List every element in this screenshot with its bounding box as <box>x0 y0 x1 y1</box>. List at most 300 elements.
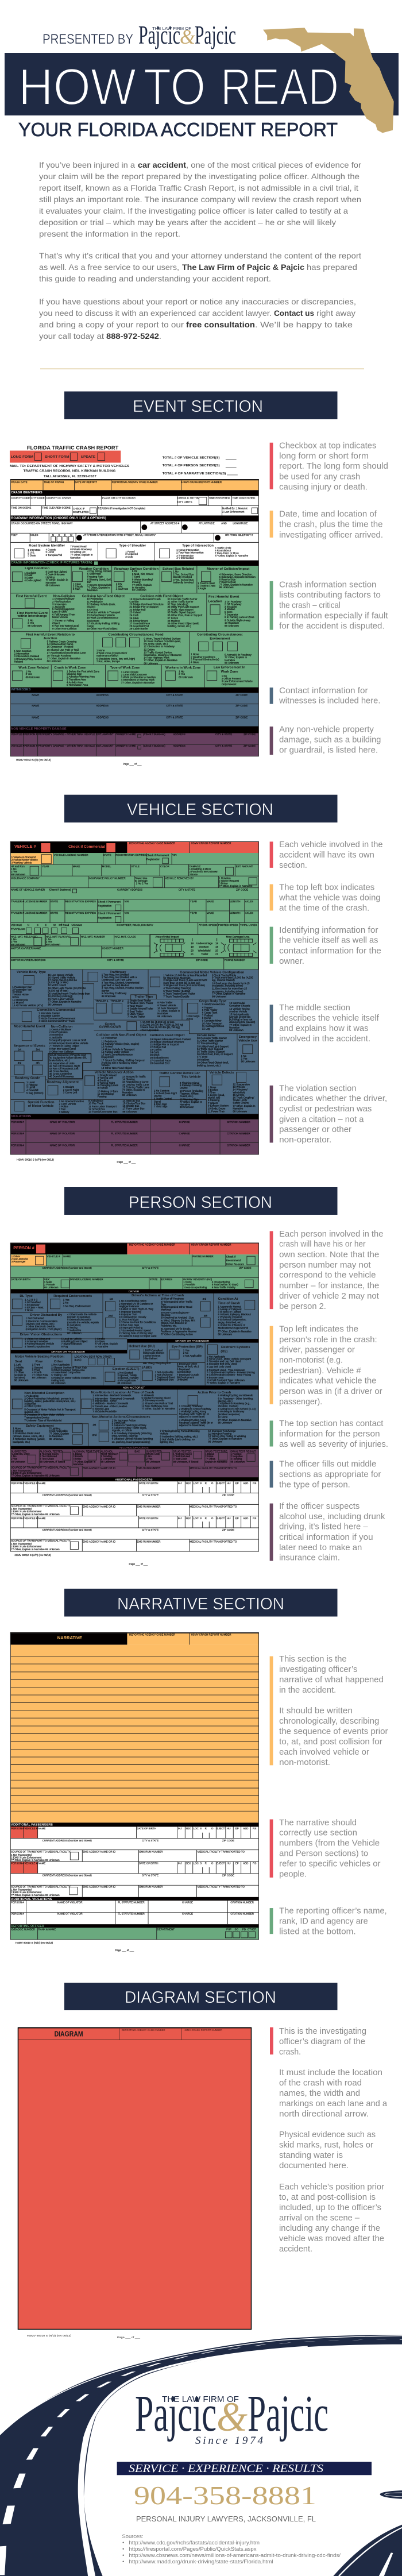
note: middle section: involved in the accident. <box>279 1034 370 1044</box>
crash information block: Contributing Circumstances: Road <box>109 633 164 636</box>
additional passengers block: ABD <box>243 1862 248 1865</box>
additional passengers block: LOC: S <box>194 1482 202 1485</box>
crash information block: Related <box>14 660 23 663</box>
roadway information block: 1 Interstate <box>28 549 41 551</box>
vehicle identification block: VEHICLE LICENSE NUMBER <box>54 853 88 856</box>
vehicle identification block: 1 No 2 Yes <box>136 882 149 885</box>
vehicle description block: 38 Mailbox <box>197 1059 210 1061</box>
person details block: 3 Ejected, Partially <box>117 1377 139 1380</box>
person details block: Roadway with Traffic (in or <box>179 1413 210 1416</box>
person details block: 7 Deployed-Curtain <box>177 1373 199 1376</box>
vehicle description block: 11 Overtaking/ <box>98 1092 114 1095</box>
vehicle identification block: Towed due <box>135 877 148 880</box>
additional passengers block: CURRENT ADDRESS (Number and Street) <box>42 1494 92 1497</box>
non vehicle property damage block: OWNER’S NAME <box>115 733 136 736</box>
additional passengers block: HU <box>227 1827 231 1830</box>
violations block: PERSON # <box>11 1121 24 1123</box>
additional violations block: FL STATUTE NUMBER <box>118 1901 145 1904</box>
intro paragraph 1: it evaluates your claim. If the investigating police officer is later called to testify at a <box>39 206 348 215</box>
intro paragraph 2: The Law Firm of Pajcic & Pajcic <box>182 262 304 272</box>
crash date and time row: TIME OF CRASH <box>44 481 64 484</box>
witnesses block: NAME <box>32 704 39 707</box>
violations block: CHARGE <box>179 1121 190 1123</box>
roadway information block: FEET <box>11 534 18 536</box>
vehicle description block: Vehicle Body Type <box>17 971 47 974</box>
vehicle identification block: TRAILER # <box>11 900 24 903</box>
non vehicle property damage block: ADDRESS <box>173 733 185 736</box>
person details block: (navigation device, DVD player) <box>26 1327 62 1330</box>
person contact block: 1 Driver <box>11 1255 21 1258</box>
vehicle identification block: to Damage: <box>135 879 148 882</box>
person details block: Required Endorsements <box>53 1295 92 1298</box>
note: officer narrative: narrative of what happened <box>279 1675 384 1685</box>
non vehicle property damage block: ZIP CODE <box>243 733 256 736</box>
crash information block: 88 Unknown <box>225 624 239 627</box>
crash information block: 2 Front to Front <box>198 585 216 588</box>
form footer: HSMV 90010 S (V/P) (rev 06/13) <box>17 1158 54 1161</box>
vehicle description block: 88 Unknown <box>212 995 226 998</box>
additional passengers block: 77 Other, Explain In Narrative 88 Unknown <box>11 1859 60 1861</box>
vehicle description block: 25 Ditch <box>150 1053 160 1056</box>
note: person role: indicates what vehicle the <box>279 1377 376 1386</box>
vehicle description block: (vehicle 10,000 lbs <box>229 1015 251 1018</box>
note: date and time: the crash, plus the time the <box>279 520 383 530</box>
crash information block: 23 Culvert <box>129 611 142 614</box>
vehicle description block: 4 Two-Way, Divided, Positive Median <box>102 987 144 990</box>
vehicle description block: 9 Concrete Mixer <box>202 1019 222 1022</box>
vehicle description block: 1 Interstate Carrier <box>38 1011 60 1014</box>
additional passengers block: EMS RUN NUMBER <box>137 1540 161 1543</box>
person details block: 2 Inclement Weather <box>25 1340 48 1343</box>
crash information block: 77 Other, Explain in Narrative <box>47 657 80 660</box>
person details block: 3 Right <box>14 1369 22 1372</box>
crash identifiers block: COMPLETED <box>73 511 89 513</box>
person details block: Vehicle <box>160 1432 168 1435</box>
vehicle identification block: 88 Unknown <box>46 943 60 946</box>
vehicle description block: 8 Bus <box>12 996 20 999</box>
additional passengers block: 2 EMS 3 Law Enforcement <box>11 1510 42 1513</box>
note: crash information: the crash – critical <box>279 601 341 611</box>
crash information block: 15 Crossover - Related <box>47 645 74 648</box>
alcohol and drug block: EMS AGENCY NAME OR ID <box>83 1466 115 1469</box>
additional passengers block: EMS RUN NUMBER <box>137 1505 161 1508</box>
person details block: Driver Vision Obstructions <box>20 1333 62 1337</box>
vehicle identification block: STATE <box>51 912 58 914</box>
vehicle description block: 8 Ran into Water/Canal <box>49 1047 76 1050</box>
intro text <box>39 160 361 341</box>
person details block: 28 Disregarded Other Road <box>161 1306 192 1308</box>
note: checkbox: causing injury or death. <box>279 482 368 492</box>
vehicle description block: [4,536 kg] or less) <box>48 981 68 984</box>
vehicle identification block: HAZ. MAT. RELEASED <box>11 935 37 938</box>
person contact block: 5 Fatal (within 30 days) <box>212 1283 238 1286</box>
person contact block: CITY & STATE <box>142 1266 159 1269</box>
intro paragraph 3: Contact us <box>274 308 314 318</box>
vehicle description block: 5 Truck Tractor (bobtail) <box>163 990 191 992</box>
person details block: Helmet Use (HU) <box>129 1345 155 1348</box>
crash information block: Loss or Shift <box>52 611 67 613</box>
witnesses block: NAME <box>32 693 39 696</box>
crash information block: 4 Jackknife <box>52 605 65 608</box>
additional passengers block: 2 EMS 3 Law Enforcement <box>11 1856 42 1859</box>
form footer: HSMV 90010 S (V/P) (rev 06/13) <box>14 1554 51 1557</box>
note: physical evidence <box>279 2130 376 2171</box>
vehicle description block: 6 Truck Tractor/Semi-Trailer <box>163 992 195 995</box>
footer: law firm logo: Pajcic <box>135 2385 217 2442</box>
alcohol and drug block: DRUG TEST TYPE: <box>205 1450 228 1453</box>
intro paragraph 3: you need to discuss it with an experienced car accident lawyer. <box>39 308 272 318</box>
vehicle description block: 17 Cargo Van (10,000 lbs <box>48 979 78 982</box>
additional violations block: CHARGE <box>182 1913 193 1915</box>
person details block: In Narrative <box>49 1435 63 1438</box>
vehicle identification block: 1 Vehicle in Transport <box>11 856 36 859</box>
person contact block: 2 Non-Motorist <box>11 1257 29 1260</box>
footer: sources: Sources: <box>122 2533 144 2540</box>
vehicle description block: 13 Wheels <box>233 1086 245 1088</box>
intro paragraph 1: If you’ve been injured in a <box>39 160 135 169</box>
person details block: 3 Ill (sick) or Fainted <box>218 1310 241 1313</box>
person details block: 3 Other Enclosed Cargo Area <box>51 1369 85 1372</box>
person details block: Combination <box>177 1370 192 1373</box>
vehicle description block: 20 Bridge Overhead Structure <box>150 1040 184 1043</box>
crash information block: 77 Other, Explain In Narrative <box>144 659 177 662</box>
panel: narrative form <box>10 1632 259 1952</box>
person contact block: VEHICLE # <box>47 1255 60 1258</box>
additional passengers block: R <box>205 1862 207 1865</box>
non vehicle property damage block: NON VEHICLE PROPERTY DAMAGE <box>11 728 67 731</box>
roadway information block: Road System Identifier <box>29 544 65 548</box>
sidebar: narrative notes <box>270 1655 388 1937</box>
vehicle description block: 10,000 lbs [4,536 kg]) <box>48 995 73 998</box>
reporting officer block: REPORTING OFFICER <box>11 1925 44 1928</box>
vehicle description block: 5 Steering <box>208 1099 220 1102</box>
section heading: vehicle: VEHICLE SECTION <box>127 801 273 819</box>
crash information block: 7 Severe Crosswinds <box>87 584 112 586</box>
vehicle identification block: PHONE NUMBER <box>225 959 246 961</box>
crash information block: 6 Dark-Unknown <box>45 573 65 576</box>
crash identifiers block: TIME DISPATCHED <box>232 496 255 499</box>
alcohol and drug block: 88 Unknown, If Tested <box>173 1461 199 1463</box>
crash information block: Motor Vehicle <box>52 616 68 619</box>
crash information block: 21 Bridge Pier or Support <box>129 605 159 608</box>
note: each person: correspond to the vehicle <box>279 1271 376 1280</box>
person details block: 1 Not Distracted <box>26 1317 44 1320</box>
additional passengers block: PERSON # <box>11 1517 24 1520</box>
non vehicle property damage block <box>10 726 258 756</box>
person details block: 4 Not Applicable <box>117 1379 136 1382</box>
person details block: 88 Unknown <box>49 1438 64 1440</box>
vehicle description block: 14 Motor Vehicle in Transport <box>101 1048 135 1051</box>
person details block: 6 Bicycle Lane <box>92 1408 110 1411</box>
vehicle description block: 4 Backing <box>98 1079 109 1082</box>
vehicle description block: 3 Curve Left <box>63 1091 78 1094</box>
note: crash information: for the accident is disputed. <box>279 621 385 631</box>
vehicle identification block: STATE <box>103 853 111 856</box>
alcohol and drug block: 88 Unknown, If Tested <box>40 1461 65 1463</box>
crash information block: 6 Rear to Side <box>219 578 236 581</box>
person details block: Time of Crash <box>218 1302 240 1306</box>
vehicle description block: kg), Cannot Classify <box>212 979 235 982</box>
vehicle identification block: 1 No <box>46 938 52 941</box>
vehicle description block: Narrative <box>229 1026 240 1029</box>
crash information block: 4 Dark-Lighted <box>24 579 41 582</box>
additional passengers block: SEX <box>185 1862 191 1865</box>
crash identifiers block: TIME ON SCENE <box>11 506 31 509</box>
note: physical evidence: Physical evidence such as <box>279 2130 376 2139</box>
note: own section: accident will have its own <box>279 851 374 860</box>
additional violations block: NAME OF VIOLATOR <box>57 1901 83 1904</box>
additional passengers block: O <box>211 1517 214 1520</box>
person details block: 1 A 2 B 3 C <box>25 1298 38 1301</box>
witnesses block <box>10 688 258 726</box>
crash information block: 88 Unknown <box>219 586 234 589</box>
person details block: 1 Not Applicable <box>155 1370 173 1373</box>
person details block: 1 Yes <box>183 1349 190 1351</box>
vehicle identification block: HAZ. MAT. CLASS <box>115 935 136 938</box>
additional passengers block: LOC: S <box>194 1827 202 1830</box>
crash information block: 88 Unknown <box>47 659 61 662</box>
crash information block: 88 Unknown <box>179 676 193 679</box>
additional passengers block: SEX <box>185 1827 191 1830</box>
roadway information block: AT STREET ADDRESS # <box>150 522 180 525</box>
alcohol and drug block: ALCOHOL TEST TYPE: <box>73 1450 100 1453</box>
person contact block: PHONE NUMBER <box>192 1255 214 1258</box>
vehicle description block: 9 Ambulance <box>88 1099 103 1102</box>
vehicle description block: 4th <box>36 1061 40 1064</box>
alcohol and drug block: 3 Test Given <box>40 1458 54 1461</box>
note: vehicle positions: to, at and post-collision is <box>279 2193 376 2202</box>
additional passengers block: ZIP CODE <box>222 1494 234 1497</box>
subtitle: YOUR FLORIDA ACCIDENT REPORT <box>18 119 338 140</box>
narrative lines <box>10 1645 258 1822</box>
vehicle description block: 4 Lights (head, <box>208 1094 225 1096</box>
intro paragraph 3: 888-972-5242 <box>106 331 159 341</box>
crash information block: 2 Fire/Explosion <box>52 600 71 603</box>
additional passengers block <box>10 1477 258 1551</box>
person details block: 10 Improper Turn/Merge <box>208 1430 236 1432</box>
crash information block: 17 Struck By Falling, Shifting <box>87 622 120 625</box>
reporting officer block <box>10 1924 258 1940</box>
person details block: 1 Crossing Roadway <box>179 1405 203 1408</box>
footer: sources: • <box>122 2540 124 2546</box>
intro paragraph 1: still plays an important role. The insurance company will review the crash report when <box>39 195 361 204</box>
crash identifiers block <box>10 490 258 516</box>
vehicle description block: 13 Intermodal <box>229 1002 245 1005</box>
roadway information block: 6 Roundabout <box>215 549 231 552</box>
crash information block: 4 Ice/Frost <box>116 588 129 590</box>
form footer: Page ___ of ___ <box>115 1949 134 1952</box>
panel: diagram form: DIAGRAM <box>55 2030 83 2038</box>
note: identifying information: contact information for the <box>279 947 381 956</box>
vehicle identification block: Unknown <box>72 924 83 926</box>
person details block: 7 Child Restraint System - Forward Facing <box>207 1371 255 1374</box>
person contact block: 2 Female <box>44 1283 55 1286</box>
note: crash information <box>270 581 388 631</box>
person details block: In Narrative <box>95 1345 109 1348</box>
vehicle description block: Traffic Control Device For <box>159 1072 200 1075</box>
alcohol and drug block: 3 Test Given <box>173 1458 188 1461</box>
vehicle description block: 19 Impact Attenuator/Crash Cushion <box>150 1038 191 1041</box>
crash information block: 4 Activity Area <box>67 681 83 683</box>
vehicle description block: Equipment <box>101 1056 114 1059</box>
vehicle description block: 7 Wipers <box>208 1102 218 1104</box>
person details block: 2 Operated MV in Careless or <box>119 1303 153 1306</box>
violations block: NAME OF VIOLATOR <box>50 1132 75 1135</box>
person details block: narrative) <box>14 1376 25 1379</box>
person details block: 2 Electronic Communication <box>26 1320 58 1323</box>
note: alcohol use: later need to make an <box>279 1543 362 1552</box>
vehicle description block: 44 Cross Median <box>49 1070 69 1073</box>
note: officer narrative: It should be written <box>279 1706 353 1716</box>
crash information block: Roadway Surface Condition <box>114 567 159 571</box>
vehicle identification block: Off-Road <box>59 924 69 926</box>
vehicle description block: 3 Uphill <box>26 1086 35 1088</box>
roadway information block: 3 Curb <box>125 555 133 558</box>
vehicle identification block: LICENSE NUMBER <box>25 912 48 914</box>
crash information block: 1 Clear <box>73 582 82 585</box>
roadway information block: 77 Other, Explain In <box>70 554 93 557</box>
note: officer narrative <box>270 1655 388 1767</box>
alcohol and drug block: 2 Breath <box>73 1455 83 1458</box>
note: vehicle positions: arrival on the scene – <box>279 2214 360 2223</box>
vehicle description block: 77 Other, Explain in Narrative <box>212 992 246 995</box>
additional passengers block: EMS AGENCY NAME OR ID <box>83 1505 115 1508</box>
note: identifying information: Identifying information for <box>279 926 378 935</box>
alcohol and drug block: 2 Completed <box>100 1458 115 1461</box>
vehicle identification block: TRAILER # <box>11 912 24 914</box>
person details block: 7 Signs/Billboards <box>61 1342 82 1345</box>
person contact block: CURRENT ADDRESS (Number and Street) <box>42 1266 92 1269</box>
person details block: DRIVER <box>129 1290 140 1293</box>
person details block: 5 Deployed-Other <box>177 1362 198 1365</box>
crash information block: 39 Other Fixed Object (wall, <box>168 622 199 625</box>
vehicle description block: Trailer Type <box>134 995 153 999</box>
person details block: 21 Wrong Side of Wrong Way <box>119 1332 153 1335</box>
section heading: diagram: DIAGRAM SECTION <box>125 1988 276 2007</box>
additional passengers block: NAME <box>38 1517 45 1520</box>
roadway information block: 2 Unpaved <box>125 553 138 555</box>
crash information block: building, tunnel, etc.) <box>168 625 191 628</box>
vehicle identification block: 2 Parked Motor Vehicle <box>11 858 38 861</box>
form footer: HSMV 90010 S (E) (rev 06/13) <box>16 759 51 762</box>
vehicle description block: (painted >4 feet) Median <box>102 984 130 987</box>
note: location requirements: names, the width and <box>279 2089 360 2098</box>
crash information block: Object <box>52 621 60 624</box>
person details block: 8 Child Restraint System - Rear Facing <box>207 1373 252 1376</box>
section heading: diagram <box>64 1983 338 2010</box>
footer: law firm logo: & <box>217 2394 248 2440</box>
vehicle description block: 15 Parked Motor Vehicle <box>101 1051 129 1053</box>
non vehicle property damage block: PROPERTY DAMAGE – OTHER THAN VEHICLE <box>38 733 95 736</box>
person details block: 2 Asleep or Fatigued <box>218 1308 242 1311</box>
crash identifiers block: CRASH IDENTIFIERS <box>11 491 42 495</box>
logo: Pajcic and Pajcic: Pajcic <box>195 20 236 49</box>
narrative header row: REPORTING AGENCY CASE NUMBER <box>129 1633 176 1636</box>
vehicle description block: 8 Flashing Signal <box>180 1082 199 1084</box>
additional passengers block: MEDICAL FACILITY TRANSPORTED TO <box>190 1540 237 1543</box>
alcohol and drug block: 88 Unknown <box>11 1461 25 1463</box>
roadway information block: OR FROM MILEPOST # <box>225 534 253 536</box>
person details block: 77 Other, Explain In Narrative <box>218 1419 252 1422</box>
vehicle description block: 21 Bridge Pier or Support <box>150 1043 179 1046</box>
witnesses block: ZIP CODE <box>235 716 248 719</box>
crash information block: 4 Sideswipe, Same Direction <box>219 573 252 576</box>
vehicle description block: 1st <box>18 1048 22 1051</box>
note: officer narrative: investigating officer’s <box>279 1665 357 1674</box>
person details block: DRIVER OR PASSENGER <box>175 1339 210 1343</box>
person details block: 3 Third <box>32 1369 40 1372</box>
note: section numbers: refer to specific vehicles or <box>279 1860 381 1869</box>
vehicle description block: TRAILER 1 <box>95 999 109 1002</box>
panel: vehicle form <box>10 841 259 1163</box>
non vehicle property damage block: ZIP CODE <box>243 744 256 747</box>
additional passengers block: SEX <box>185 1482 191 1485</box>
crash information block: 2 Weather Conditions <box>191 655 216 658</box>
additional passengers block: 2 EMS 3 Law Enforcement <box>11 1545 42 1548</box>
alcohol and drug block: 1 No <box>11 1455 17 1458</box>
vehicle identification block: REGISTRATION EXPIRES <box>115 853 146 856</box>
roadway information block: 7 Forest Road <box>70 545 87 548</box>
vehicle identification block: (Check If Business) <box>49 889 71 891</box>
alcohol and drug block: DRUG USE: <box>146 1453 160 1455</box>
note: identifying information: owner. <box>279 957 304 966</box>
note: violation section: non-operator. <box>279 1136 331 1145</box>
person details block: 3 Deployed-Front <box>155 1376 175 1378</box>
crash date and time row: DATE OF REPORT <box>75 481 97 484</box>
crash information block: Directly Involved <box>173 576 192 578</box>
vehicle description block: 12 Suspension <box>233 1083 250 1086</box>
crash information block: 8 Water (standing/ <box>132 578 153 581</box>
additional passengers block: CURRENT ADDRESS (Number and Street) <box>42 1528 92 1531</box>
person details block: Non-Motorist Actions/Circumstances <box>92 1415 150 1419</box>
crash date and time row: REPORTING AGENCY CASE NUMBER <box>112 481 158 484</box>
roadway information block: 8 Private Roadway <box>70 548 92 551</box>
person details block: 10 Followed too Closely <box>119 1315 146 1318</box>
person details block: 3 Parked/Stopped Vehicle <box>25 1342 55 1345</box>
person details block: Sign <box>161 1303 166 1306</box>
logo: Pajcic and Pajcic: Pajcic <box>138 20 180 49</box>
witnesses block: CITY & STATE <box>166 693 183 696</box>
note: each person <box>270 1230 383 1311</box>
panel: diagram form: REPORTING AGENCY CASE NUMBER <box>122 2029 165 2032</box>
vehicle description block: occupants, including driver) <box>212 984 243 987</box>
additional passengers block: MEDICAL FACILITY TRANSPORTED TO <box>198 1851 245 1853</box>
vehicle description block: 88 Unknown <box>229 1029 243 1032</box>
vehicle description block: 15 Charter/Tour Bus <box>122 1102 146 1105</box>
person details block: 1 No Improper Action <box>112 1419 136 1422</box>
crash information block: Junction <box>43 637 57 640</box>
vehicle description block: GVWR/GCWR <box>99 1025 121 1029</box>
note: contact information <box>270 1419 388 1449</box>
additional passengers block: NAME <box>38 1827 45 1830</box>
person details block: 12 Drove too Fast for Conditions <box>119 1321 156 1324</box>
non vehicle property damage block: ADDRESS <box>173 744 185 747</box>
person details block: 7 None <box>25 1308 33 1311</box>
impact location diagram: 20 <box>215 949 218 952</box>
note: top left box: what the vehicle was doing <box>279 894 381 903</box>
vehicle description block: 12 Railway Vehicle (train, engine) <box>101 1042 140 1045</box>
vehicle description block: 20 Medium/Heavy Trucks (more than <box>48 992 90 995</box>
crash information block: 1 On Roadway <box>225 600 242 603</box>
note: checkbox <box>270 442 388 492</box>
additional passengers block: EMS AGENCY NAME OR ID <box>83 1885 115 1888</box>
crash information block: 1 Lane Closure <box>121 671 138 674</box>
vehicle description block: This Vehicle <box>181 1076 201 1079</box>
non vehicle property damage block: (Check If Business) <box>143 733 165 736</box>
vehicle identification block: S <box>37 924 38 926</box>
person details block: 88 Unknown <box>218 1333 233 1335</box>
crash information block: 88 Unknown <box>45 584 60 587</box>
